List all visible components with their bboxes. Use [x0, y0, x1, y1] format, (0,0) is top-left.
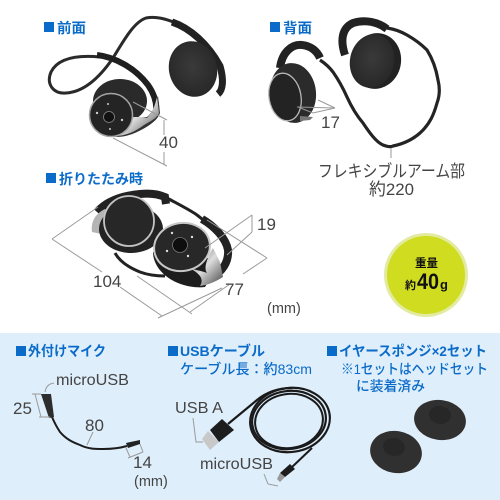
dimension: 14 and unit: (mm) — [134, 474, 168, 490]
heading: ear sponge: ※1セットはヘッドセット — [341, 361, 488, 377]
dimension: 17: 17 — [321, 113, 340, 132]
heading: ear sponge: イヤースポンジ×2セット — [339, 343, 487, 359]
dimension: 19: 19 — [257, 215, 276, 234]
dimension: 40 — [113, 102, 178, 166]
heading: folded: 折りたたみ時 — [59, 171, 143, 187]
image: USB cable — [202, 383, 334, 482]
badge: weight 40g: 40 — [417, 269, 439, 294]
dimension: 25 and microUSB label: 25 — [13, 399, 32, 418]
callout: flexible arm length: フレキシブルアーム部 — [318, 161, 465, 181]
image: microphone cable — [41, 394, 140, 449]
heading: front view — [44, 20, 86, 36]
heading: USB cable: USBケーブル — [180, 343, 265, 359]
dimension: 80 — [85, 416, 104, 445]
image: headset back — [265, 21, 439, 147]
badge: weight 40g: 約 — [405, 278, 416, 292]
dimension: 40: 40 — [159, 133, 178, 152]
heading: USB cable — [168, 343, 312, 377]
heading: back view — [270, 20, 312, 36]
heading: ear sponge: に装着済み — [356, 378, 425, 394]
callout: flexible arm length: 約220 — [369, 180, 414, 199]
dimension: 14 and unit: 14 — [133, 453, 152, 472]
dimension: 77 — [158, 258, 267, 318]
dimension: 25 and microUSB label — [13, 372, 129, 418]
image: folded headset — [92, 194, 228, 287]
heading: ear sponge — [327, 343, 488, 394]
heading: back view: 背面 — [283, 20, 312, 36]
labels: USB A and microUSB — [175, 400, 278, 486]
dimension: 19 — [205, 215, 276, 255]
image: ear sponge pair — [367, 397, 469, 477]
badge: weight 40g — [384, 233, 468, 317]
heading: external mic: 外付けマイク — [28, 343, 106, 359]
dimension: 17 — [297, 100, 340, 132]
callout: flexible arm length — [318, 148, 465, 199]
dimension: 104: 104 — [93, 272, 121, 291]
image: headset front — [49, 17, 223, 137]
dimension: 80: 80 — [85, 416, 104, 435]
badge: weight 40g: 重量 — [415, 256, 438, 270]
labels: USB A and microUSB: microUSB — [200, 456, 273, 473]
heading: front view: 前面 — [57, 20, 86, 36]
panel: accessories background — [0, 333, 500, 500]
dimension: 25 and microUSB label: microUSB — [56, 372, 129, 389]
dimension: 77: 77 — [225, 280, 244, 299]
badge: weight 40g: g — [440, 277, 448, 292]
labels: USB A and microUSB: USB A — [175, 400, 223, 417]
heading: USB cable: ケーブル長：約83cm — [180, 361, 312, 377]
dimension: 104 — [52, 207, 267, 316]
unit: mm: (mm) — [267, 301, 301, 317]
dimension: 14 and unit — [126, 444, 168, 490]
